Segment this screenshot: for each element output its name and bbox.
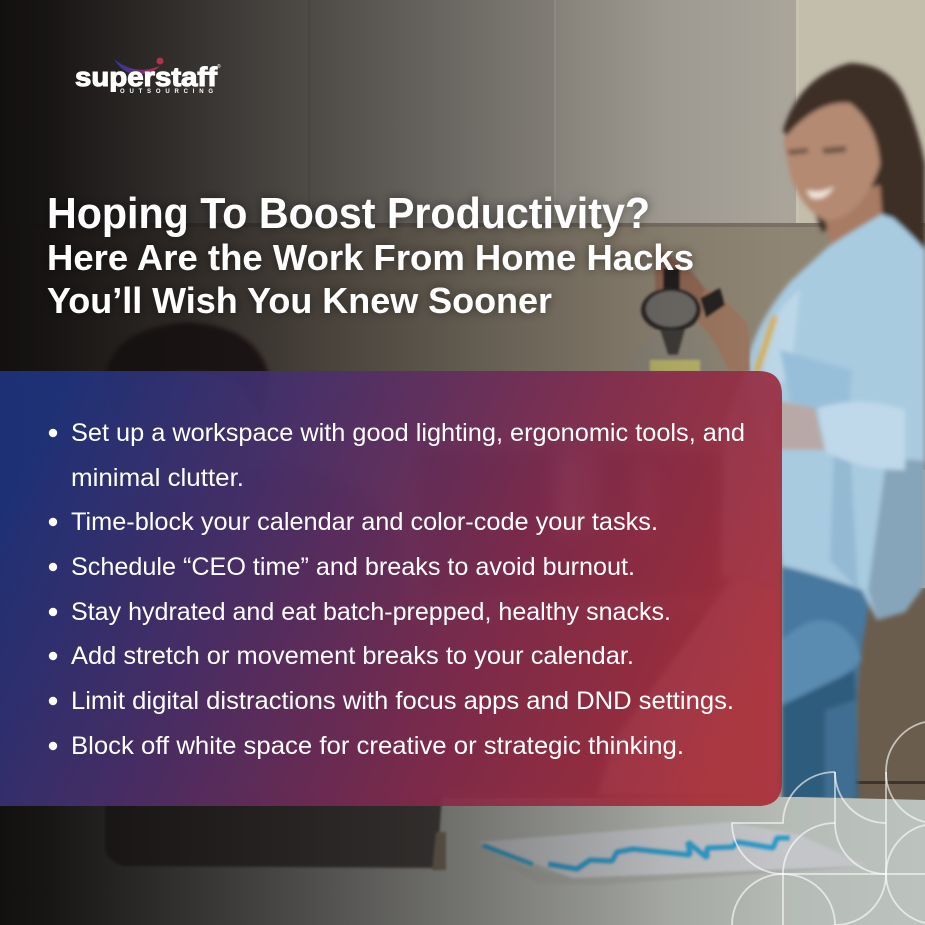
tip 1: minimal clutter. xyxy=(71,464,244,492)
document with line chart xyxy=(478,822,868,885)
wall cabinets xyxy=(0,0,925,230)
logo swoosh xyxy=(114,59,160,74)
panel background xyxy=(0,371,782,806)
tip 1: Set up a workspace with good lighting, ergonomic tools, and xyxy=(71,419,745,447)
tip 5: Add stretch or movement breaks to your calendar. xyxy=(71,642,634,670)
tip 1 xyxy=(49,419,745,492)
tip 7: Block off white space for creative or strategic thinking. xyxy=(71,732,684,760)
panel: productivity tips xyxy=(0,371,782,806)
logo: superstaff outsourcing xyxy=(75,58,221,95)
kettle, hand and mug xyxy=(630,250,750,372)
man at laptop xyxy=(60,322,440,810)
right side cabinets xyxy=(850,470,925,803)
kitchen appliances behind the panel xyxy=(400,450,730,800)
decorative line-art pattern xyxy=(732,722,925,925)
logo registered mark: ® xyxy=(217,63,221,70)
face and neck xyxy=(822,185,882,245)
title xyxy=(47,189,694,321)
tip 2: Time-block your calendar and color-code your tasks. xyxy=(71,508,658,536)
jeans xyxy=(782,560,868,800)
backsplash and counter wall xyxy=(0,223,925,810)
tip 6: Limit digital distractions with focus apps and DND settings. xyxy=(71,687,734,715)
subheadline line two: You’ll Wish You Knew Sooner xyxy=(47,280,552,321)
shirt xyxy=(745,214,925,620)
logo wordmark: superstaff xyxy=(75,62,218,92)
paper under the panel xyxy=(597,575,782,800)
woman xyxy=(745,63,925,800)
tip 3: Schedule “CEO time” and breaks to avoid burnout. xyxy=(71,553,635,581)
sleeve under the panel xyxy=(722,372,782,590)
tip 4: Stay hydrated and eat batch-prepped, healthy snacks. xyxy=(71,598,671,626)
laptop xyxy=(105,795,442,868)
logo subtitle: OUTSOURCING xyxy=(120,89,213,95)
headline: Hoping To Boost Productivity? xyxy=(47,189,650,238)
table top xyxy=(0,797,925,925)
subheadline line one: Here Are the Work From Home Hacks xyxy=(47,237,694,278)
hair back xyxy=(783,63,925,262)
